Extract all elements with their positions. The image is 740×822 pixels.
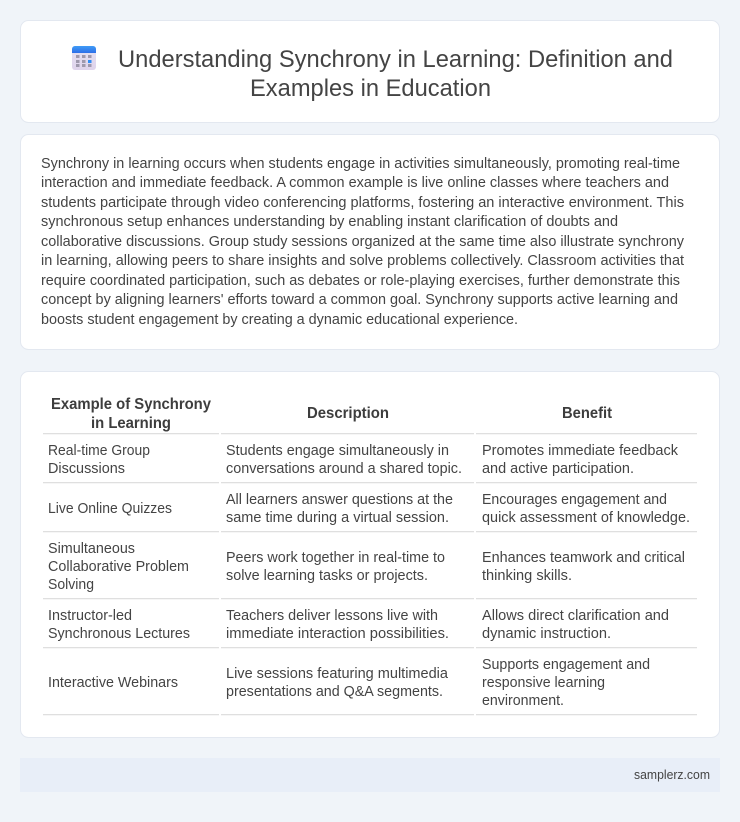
row: real-time group discussions: Real-time Group [48,443,150,459]
row: real-time group discussions: Students engage simultaneously in [226,443,449,459]
row: live online quizzes: same time during a virtual session. [226,510,449,526]
text block: definition: concept by aligning learners' efforts toward a common goal. Synchrony supports active learning and [41,292,678,308]
text block: definition: Synchrony in learning occurs when students engage in activities simultaneously, promoting real-time [41,156,680,172]
title: Examples in Education [250,75,491,102]
text block: definition: interaction and immediate feedback. A common example is live online classes where teachers and [41,175,669,191]
row: live online quizzes [48,492,690,526]
icon: calendar [72,46,96,70]
text block: definition: in learning, allowing peers to share insights and solve problems collectively. Classroom activities that [41,253,684,269]
text block: definition: synchronous setup enhances understanding by enabling instant clarification of doubts and [41,214,618,230]
footer [20,758,720,792]
row: real-time group discussions: and active participation. [482,461,634,477]
row: live online quizzes: quick assessment of knowledge. [482,510,690,526]
row: simultaneous collaborative problem solving: Peers work together in real-time to [226,550,445,566]
table header: in Learning [91,415,171,432]
title card [20,20,720,122]
row: real-time group discussions: Promotes immediate feedback [482,443,679,459]
title [118,46,673,102]
row: instructor-led synchronous lectures: Allows direct clarification and [482,608,669,624]
panel: examples table [20,372,720,738]
text block: definition: students participate through video conferencing platforms, fostering an interactive environment. This [41,195,684,211]
table header: Description [307,405,389,422]
table header: Example of Synchrony [51,396,211,413]
row: live online quizzes: Encourages engagement and [482,492,667,508]
row: interactive webinars: environment. [482,693,564,709]
row: interactive webinars: Supports engagement and [482,657,650,673]
table header [51,396,612,432]
row: interactive webinars: Live sessions featuring multimedia [226,666,449,682]
row: live online quizzes: All learners answer questions at the [226,492,453,508]
row: interactive webinars: responsive learning [482,675,605,691]
row: instructor-led synchronous lectures: Instructor-led [48,608,132,624]
row: instructor-led synchronous lectures [48,608,669,642]
row: real-time group discussions: conversations around a shared topic. [226,461,462,477]
row: simultaneous collaborative problem solving: solve learning tasks or projects. [226,568,428,584]
row: instructor-led synchronous lectures: Teachers deliver lessons live with [226,608,438,624]
title: Understanding Synchrony in Learning: Definition and [118,46,673,73]
row: live online quizzes: Live Online Quizzes [48,501,172,517]
row: simultaneous collaborative problem solving: Simultaneous [48,541,135,557]
text block: definition: boosts student engagement by creating a dynamic educational experience. [41,312,518,328]
text block: definition: collaborative discussions. Group study sessions organized at the same time also illustrate synchrony [41,234,685,250]
footer: samplerz.com [634,768,710,782]
table header: Benefit [562,405,612,422]
row: simultaneous collaborative problem solving: Enhances teamwork and critical [482,550,685,566]
row: interactive webinars [48,657,650,709]
row: interactive webinars: Interactive Webinars [48,675,178,691]
row: instructor-led synchronous lectures: Synchronous Lectures [48,626,190,642]
row: interactive webinars: presentations and Q&A segments. [226,684,443,700]
row: instructor-led synchronous lectures: dynamic instruction. [482,626,611,642]
text block: definition [41,156,685,328]
text block: definition: require coordinated participation, such as debates or role-playing exercises, further demonstrate this [41,273,680,289]
row: simultaneous collaborative problem solving: Solving [48,577,94,593]
row: real-time group discussions: Discussions [48,461,125,477]
row: simultaneous collaborative problem solving: thinking skills. [482,568,572,584]
panel: intro paragraph [20,134,720,350]
row: instructor-led synchronous lectures: immediate interaction possibilities. [226,626,449,642]
row: simultaneous collaborative problem solving: Collaborative Problem [48,559,189,575]
row: real-time group discussions [48,443,679,477]
row: simultaneous collaborative problem solving [48,541,685,593]
